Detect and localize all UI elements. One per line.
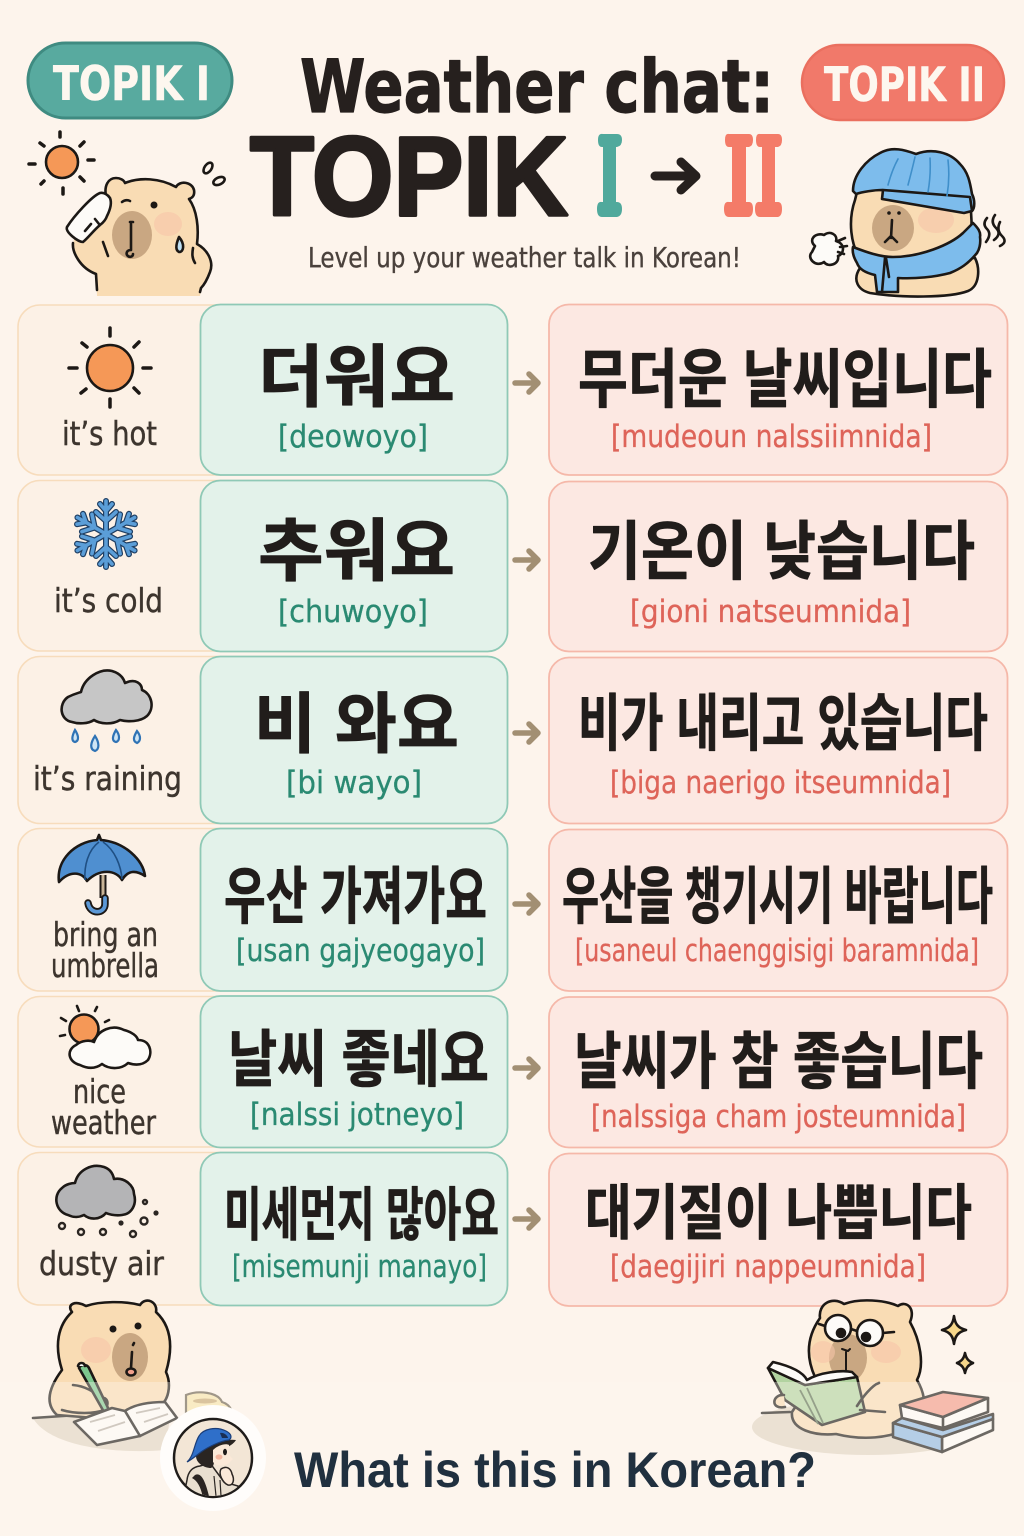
romanization I: [chuwoyo] [278,594,428,630]
arrow: level up [655,162,696,190]
hood lines [214,1476,221,1496]
face [851,180,972,262]
label: it’s raining [33,759,182,798]
romanization I: [bi wayo] [286,765,422,801]
label [51,915,159,985]
label: it’s hot [62,414,157,453]
shivers [984,215,1005,246]
breath puff [810,233,843,265]
romanization II: [daegijiri nappeumnida] [610,1249,926,1285]
romanization I: [deowoyo] [278,419,428,455]
label [51,1072,156,1142]
row 5: nice weather [18,996,1008,1148]
phrase II: 기온이 낮습니다 [588,516,975,588]
label line 2: umbrella [51,946,159,985]
romanization II: [mudeoun nalssiimnida] [611,419,932,455]
panel: English [18,996,240,1147]
panel: TOPIK I [200,828,508,991]
arrow [515,1210,538,1228]
row 4: bring an umbrella [18,828,1008,991]
icon: sun behind cloud [60,1006,150,1068]
open green book [768,1368,865,1425]
body [856,258,978,297]
phrase I: 날씨 좋네요 [228,1026,489,1095]
illustration: cold capybara with beanie and scarf [810,149,1005,297]
arrow [515,895,538,913]
panel: English [18,656,240,824]
panel: TOPIK II [549,1154,1008,1306]
beanie [853,149,974,211]
icon: small sun [29,132,94,194]
face [213,1444,230,1463]
badge: TOPIK I [28,43,232,118]
label: dusty air [39,1244,164,1283]
illustration: hot capybara with towel and sun [29,132,226,296]
phrase I: 비 와요 [254,687,459,761]
badge: TOPIK I: TOPIK I [53,57,210,112]
panel: TOPIK I [200,304,508,475]
phrase I: 더워요 [258,340,455,416]
row 3: it's raining [18,656,1008,824]
romanization II: [biga naerigo itseumnida] [610,765,951,801]
cap [187,1429,231,1462]
panel: English [18,828,240,991]
icon: snowflake [72,501,140,567]
stacked books [942,1419,993,1452]
title line: Weather chat: Weather chat: [300,45,774,130]
panel: TOPIK II [549,482,1008,652]
row 1: it's hot [18,304,1008,475]
label: it’s cold [54,581,163,620]
label line 1: bring an [53,915,158,954]
romanization I: [misemunji manayo] [232,1249,487,1285]
label line 2: weather [51,1103,156,1142]
hair [196,1440,236,1468]
panel: TOPIK I [200,480,508,652]
panel: English [18,480,240,651]
panel: TOPIK II [549,304,1008,475]
badge: TOPIK II [802,45,1004,120]
sparkles [942,1316,966,1344]
title [250,45,782,239]
row 2: it's cold [18,480,1008,652]
illustration: reading capybara with glasses and books [752,1300,993,1455]
avatar: boy with blue cap [160,1405,266,1511]
panel: TOPIK I [200,1152,508,1306]
label line 1: nice [73,1072,126,1111]
romanization II: [gioni natseumnida] [630,594,911,630]
title word: TOPIK: TOPIK [250,114,568,239]
panel: TOPIK I [200,996,508,1148]
panel: TOPIK II [549,830,1008,991]
arrow [515,374,538,392]
phrase I: 추워요 [258,514,455,590]
panel: TOPIK I [200,656,508,824]
roman numeral I [597,134,622,217]
panel: TOPIK II [549,658,1008,824]
hoodie [186,1464,239,1496]
arrow [515,724,538,742]
phrase I: 우산 가져가요 [224,863,487,932]
backpack strap [192,1474,209,1498]
arrow [515,1059,538,1077]
scarf [853,223,980,292]
panel: English [18,1152,240,1305]
icon: umbrella [59,835,145,912]
icon: sun [69,328,151,407]
illustration: studying capybara with notebook [33,1301,233,1451]
roman numeral II [724,134,782,217]
icon: rain cloud [62,670,152,751]
hand [220,1467,233,1485]
arrow [515,551,538,569]
subtitle: Level up your weather talk in Korean! [308,241,741,274]
romanization I: [nalssi jotneyo] [250,1097,464,1133]
panel: TOPIK II [549,997,1008,1148]
romanization I: [usan gajyeogayo] [236,933,485,969]
panel: English [18,305,240,475]
footer question: What is this in Korean? [294,1442,816,1498]
row 6: dusty air [18,1152,1008,1306]
phrase I: 미세먼지 많아요 [224,1183,499,1248]
icon: dust cloud [56,1166,159,1237]
